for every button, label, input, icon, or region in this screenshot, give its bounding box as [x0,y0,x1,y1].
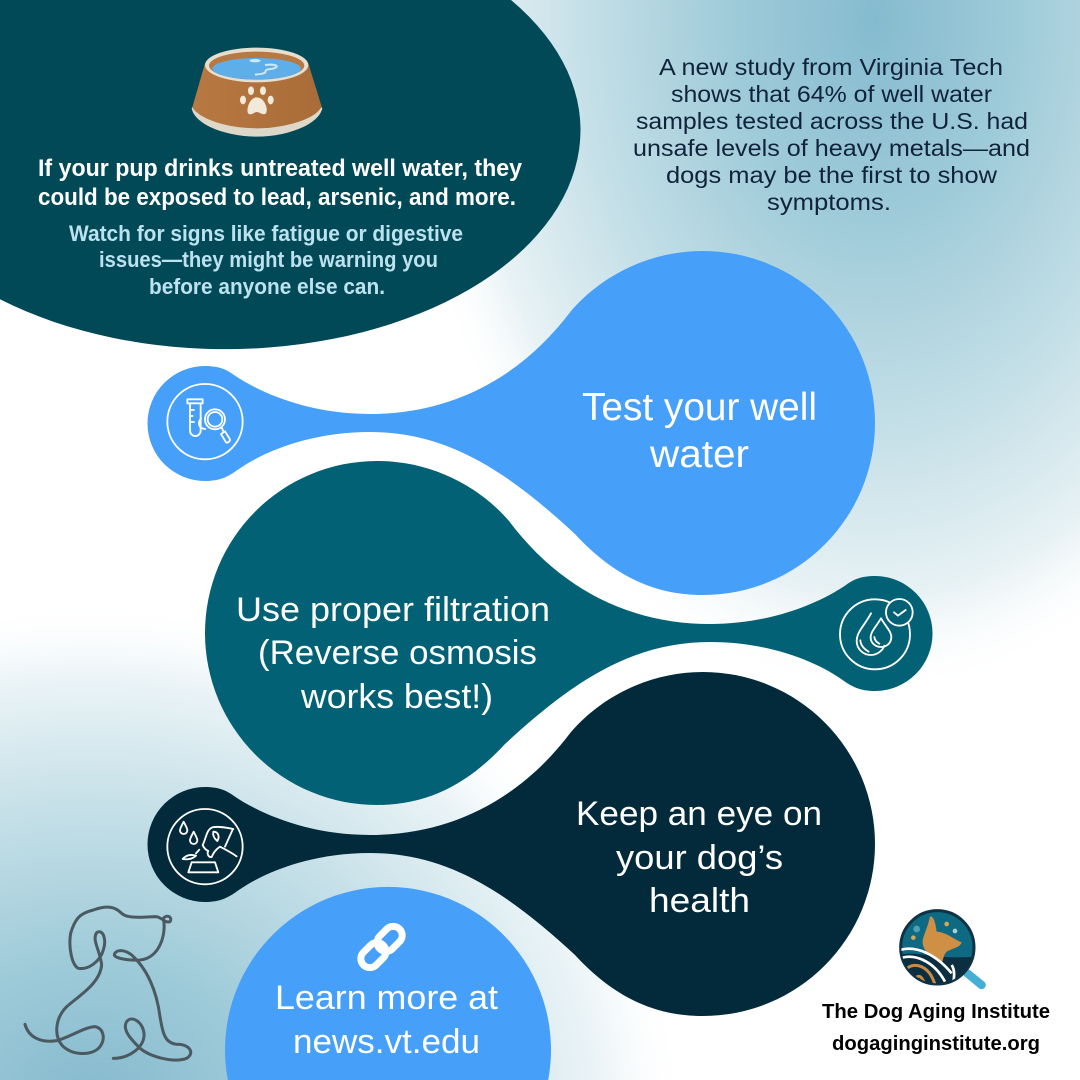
panel: test your well water [147,251,875,595]
intro headline: could be exposed to lead, arsenic, and more. [38,184,516,211]
panel: dark intro ellipse [0,0,581,349]
link text: news.vt.edu [293,1023,480,1061]
icon: chain link [357,923,406,971]
heading [576,795,822,920]
heading: Keep an eye on [576,795,822,833]
study text block: unsafe levels of heavy metals—and [633,135,1030,161]
study text block: dogs may be the first to show [666,162,998,188]
intro warning text: issues—they might be warning you [99,247,438,272]
panel: keep an eye on health [147,672,875,1016]
illustration: line-art dog [25,907,191,1060]
study text block: symptoms. [767,189,891,215]
intro headline: If your pup drinks untreated well water, they [38,155,523,182]
icon: water drops with check [840,599,913,669]
logo: Dog Aging Institute magnifier [900,911,982,988]
heading: health [649,882,750,920]
panel: learn more link [225,887,551,1080]
study text block: A new study from Virginia Tech [659,54,1003,80]
heading: works best!) [300,678,493,716]
icon: dog water bowl [192,48,322,137]
link text: Learn more at [275,979,498,1017]
organisation name and website [822,1000,1050,1055]
study text block: samples tested across the U.S. had [636,108,1028,134]
link text [275,979,498,1061]
study text block: shows that 64% of well water [671,81,992,107]
heading: (Reverse osmosis [258,634,537,672]
icon: dog drinking from bowl [167,809,243,884]
panel: use proper filtration [205,461,932,805]
study text block [633,54,1030,215]
intro warning text: before anyone else can. [149,274,385,299]
intro headline [38,155,523,211]
organisation name and website: The Dog Aging Institute [822,1000,1050,1023]
heading: Use proper filtration [236,591,550,629]
icon: test tube and magnifier [167,384,243,459]
heading: your dog’s [616,839,783,877]
heading: Test your well [582,386,817,429]
organisation name and website: dogaginginstitute.org [832,1032,1040,1055]
intro warning text: Watch for signs like fatigue or digestive [69,221,463,246]
heading: water [649,433,749,476]
heading [236,591,550,716]
intro warning text [69,221,463,299]
heading [582,386,817,476]
